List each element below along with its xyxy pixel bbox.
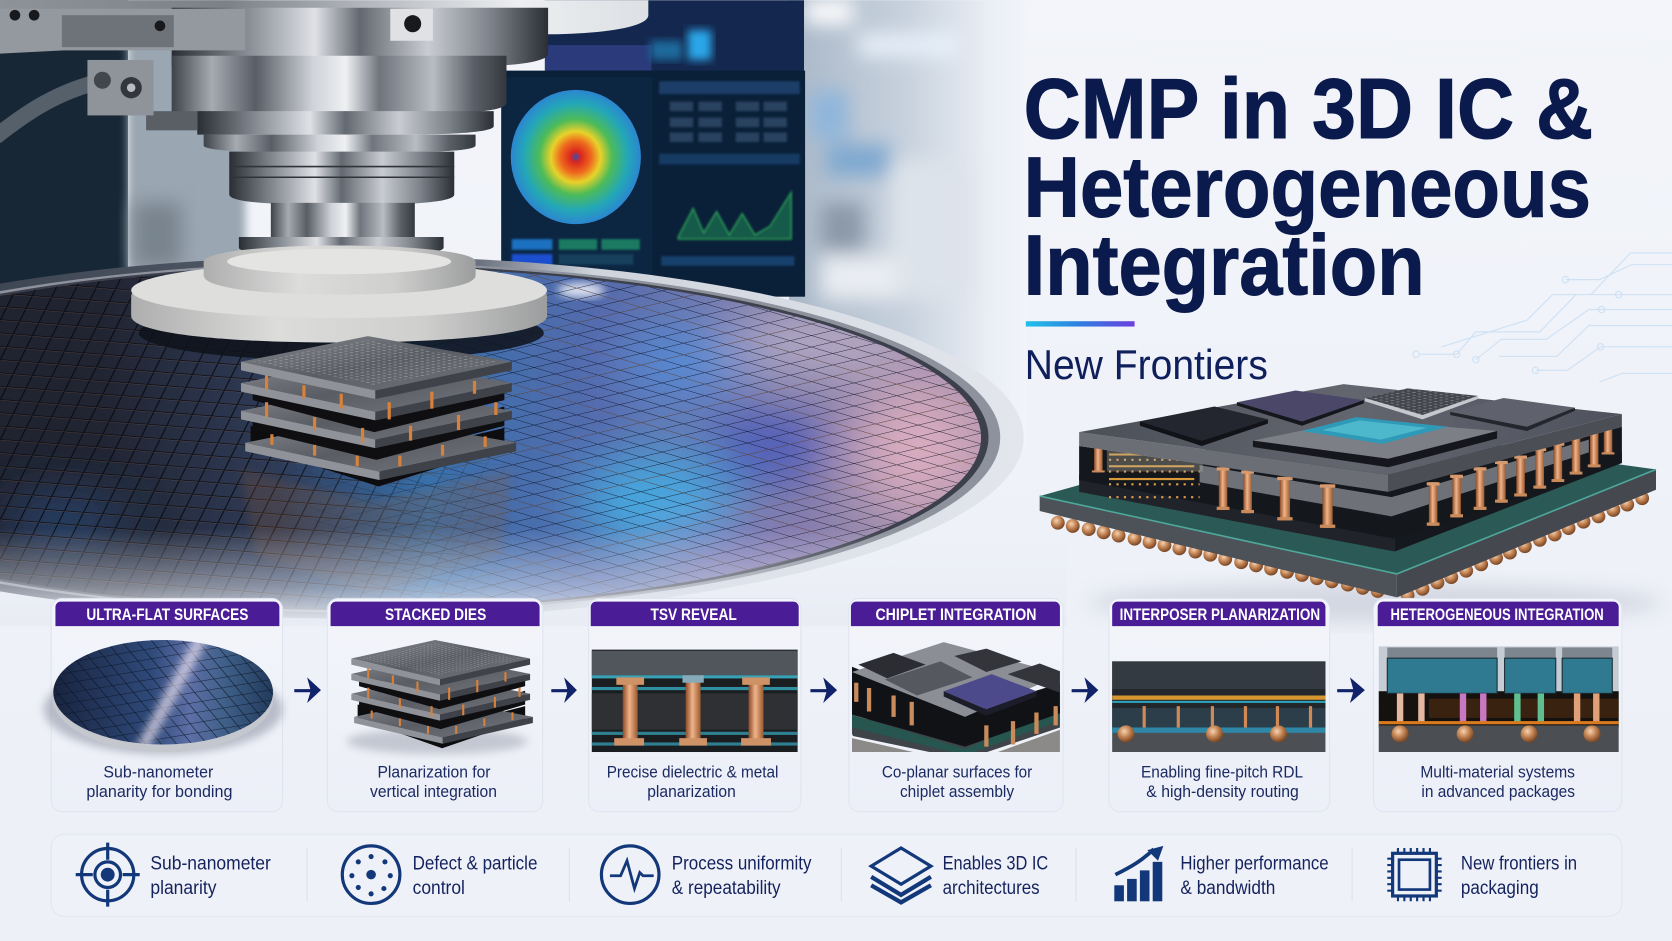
caption: Sub-nanometer [103,763,214,782]
cable and bracket [0,60,154,137]
caption: planarization [647,782,736,801]
stacked die on wafer [241,336,516,486]
card 3: TSV reveal [589,598,801,812]
benefit: packaging [1461,853,1577,899]
caption: planarity for bonding [86,782,232,801]
card header: HETEROGENEOUS INTEGRATION [1390,605,1604,624]
lower layers [1079,437,1622,533]
arrow 4 [1072,677,1098,703]
card header: ULTRA-FLAT SURFACES [86,605,248,624]
photo bottom fade [0,528,1066,626]
benefit: uniformity [672,853,812,899]
card 1: ultra-flat surfaces [44,598,283,812]
white ceramic base [131,246,547,361]
arrow 1 [294,677,321,703]
card header [1378,602,1619,626]
circuit trace decoration [1413,253,1672,382]
benefit: performance [1180,853,1329,899]
benefit: uniformity: Process uniformity [672,853,812,874]
caption [86,763,232,801]
image: TSV cross-section [592,650,798,752]
card 4: chiplet integration [842,598,1066,812]
benefit: 3D architectures: Enables 3D IC [943,853,1048,874]
card 2: stacked dies [327,598,543,812]
benefit: 3D architectures: architectures [943,878,1040,899]
benefit: planarity [150,853,271,899]
caption [1141,763,1303,801]
title: Heterogeneous [1024,141,1591,236]
benefit: defect control: Defect & particle [413,853,537,874]
caption: Multi-material systems [1420,763,1575,782]
caption: Enabling fine-pitch RDL [1141,763,1303,782]
arrow 3 [810,677,837,703]
benefit: 3D architectures [943,853,1048,899]
icon: target [76,843,140,907]
benefits bar [51,834,1622,916]
polishing column [0,0,648,256]
caption [882,763,1032,801]
dashboard screen with heat map [501,0,805,297]
icon: pulse [601,846,659,903]
accent bar [1026,321,1135,327]
chiplets [1140,388,1575,467]
caption: vertical integration [370,782,497,801]
title: Integration [1024,219,1425,314]
card header: INTERPOSER PLANARIZATION [1120,605,1320,624]
wafer rim [0,256,1024,619]
wafer surface with die grid [0,267,981,608]
card header [1112,602,1325,626]
caption: chiplet assembly [900,782,1015,801]
solder balls [1051,491,1649,602]
card 5: interposer planarization [1109,598,1330,812]
image: wafer [44,636,283,754]
icon: chip [1387,848,1442,901]
benefit: performance: & bandwidth [1180,878,1275,899]
arrow 2 [551,677,577,703]
card header [55,602,279,626]
caption [1420,763,1575,801]
benefit: defect control: control [413,878,465,899]
card header: CHIPLET INTEGRATION [875,605,1036,624]
3D package illustration [1040,384,1663,622]
benefit: packaging: packaging [1461,878,1539,899]
top slab [1079,432,1388,492]
image: chiplets on stack [852,642,1060,752]
image: multi-material package [1379,646,1619,752]
benefit: defect control [413,853,537,899]
icon: particles [342,846,400,903]
benefit: packaging: New frontiers in [1461,853,1577,874]
benefit: performance: Higher performance [1180,853,1329,874]
icon: layers [871,848,931,902]
hero photo: CMP tool over wafer [0,0,1066,626]
card header [851,602,1060,626]
caption [370,763,497,801]
card header: TSV REVEAL [650,605,737,624]
caption: Planarization for [377,763,491,782]
blurred lab background [0,0,1026,448]
image: die stack [347,640,533,754]
benefit: uniformity: & repeatability [672,878,781,899]
caption: Precise dielectric & metal [607,763,778,782]
card 6: heterogeneous integration [1373,598,1622,812]
copper pillars [1092,425,1614,528]
icon: rising chart [1114,846,1163,901]
caption: & high-density routing [1146,782,1299,801]
image: interposer cross-section [1112,661,1325,752]
card header [591,602,799,626]
caption: Co-planar surfaces for [882,763,1032,782]
caption [607,763,778,801]
subtitle: New Frontiers [1025,341,1268,388]
arrow 5 [1337,677,1365,703]
substrate [1040,496,1397,597]
caption: in advanced packages [1421,782,1575,801]
card header: STACKED DIES [385,605,486,624]
benefit: planarity: Sub-nanometer [150,853,271,874]
title [1024,62,1593,314]
card header [331,602,540,626]
benefit: planarity: planarity [150,878,217,899]
title: CMP in 3D IC & [1024,62,1593,157]
